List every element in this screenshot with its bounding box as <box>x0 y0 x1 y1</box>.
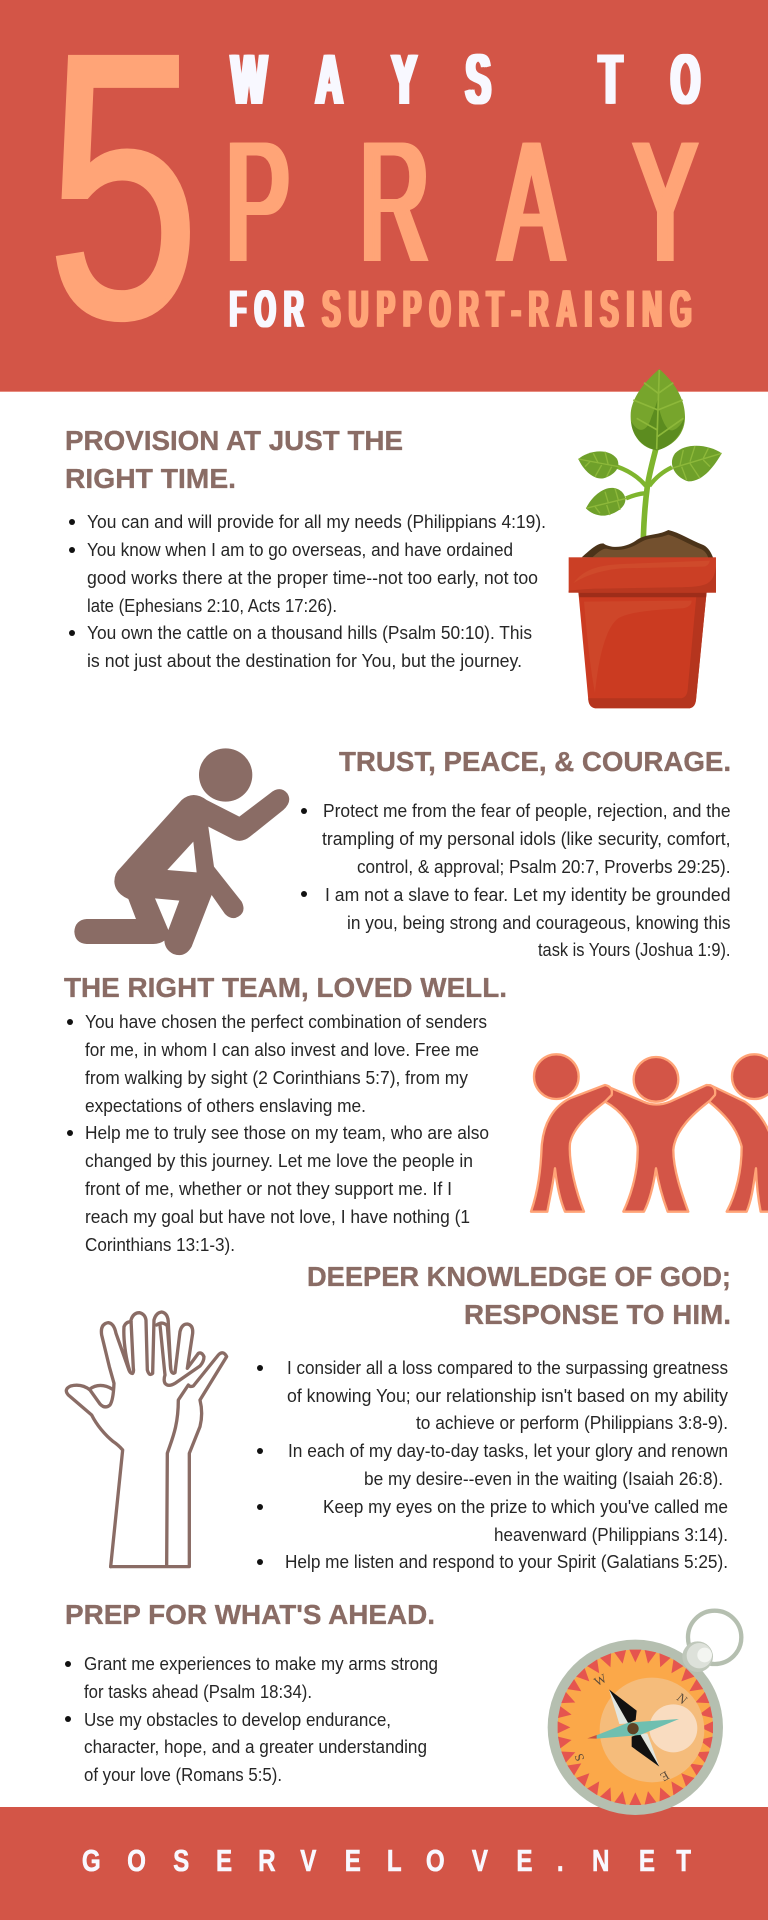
bullet list: prep: Grant me experiences to make my arms strong <box>84 1653 438 1674</box>
bullet list: provision: good works there at the proper time--not too early, not too <box>87 567 538 588</box>
heading: provision: RIGHT TIME. <box>65 463 236 494</box>
bullet list: right team: for me, in whom I can also invest and love. Free me <box>85 1039 479 1060</box>
bullet list: trust: I am not a slave to fear. Let my identity be grounded <box>325 884 730 905</box>
section: deeper knowledge <box>257 1261 731 1572</box>
bullet list: deeper knowledge <box>257 1357 729 1572</box>
bullet list: trust <box>301 800 730 960</box>
bullet list: prep: character, hope, and a greater understanding <box>84 1736 427 1757</box>
bullet list: deeper knowledge: In each of my day-to-day tasks, let your glory and renown <box>288 1440 728 1461</box>
bullet list: right team: Corinthians 13:1-3). <box>85 1234 235 1255</box>
heading: right team: THE RIGHT TEAM, LOVED WELL. <box>64 972 507 1003</box>
bullet list: prep: of your love (Romans 5:5). <box>84 1764 282 1785</box>
heading: deeper knowledge: RESPONSE TO HIM. <box>464 1299 731 1330</box>
section: right team <box>64 972 507 1255</box>
heading: prep: PREP FOR WHAT'S AHEAD. <box>65 1599 435 1630</box>
bullet list: prep: for tasks ahead (Psalm 18:34). <box>84 1681 312 1702</box>
icon: raised hands outline <box>66 1312 227 1567</box>
icon: compass: S <box>572 1752 587 1763</box>
bullet list: trust: control, & approval; Psalm 20:7, Proverbs 29:25). <box>357 856 730 877</box>
bullet list: right team: changed by this journey. Let me love the people in <box>85 1150 473 1171</box>
heading: deeper knowledge <box>307 1261 731 1330</box>
subtitle: for support-raising: FOR SUPPORT-RAISING <box>228 280 698 339</box>
icon: three people arm in arm <box>531 1054 768 1212</box>
bullet list: provision: is not just about the destination for You, but the journey. <box>87 650 522 671</box>
footer banner <box>0 1807 768 1920</box>
heading: provision: PROVISION AT JUST THE <box>65 425 403 456</box>
header banner <box>0 0 768 392</box>
bullet list: deeper knowledge: heavenward (Philippians 3:14). <box>494 1524 728 1545</box>
bullet list: right team: expectations of others enslaving me. <box>85 1095 366 1116</box>
icon: potted plant <box>569 369 722 708</box>
title: ways to: WAYS TO <box>229 41 747 120</box>
bullet list: right team: Help me to truly see those on my team, who are also <box>85 1122 489 1143</box>
section: trust, peace, courage <box>301 746 731 960</box>
bullet list: provision: You own the cattle on a thousand hills (Psalm 50:10). This <box>87 622 532 643</box>
bullet list: deeper knowledge: of knowing You; our relationship isn't based on my ability <box>287 1385 729 1406</box>
bullet list: deeper knowledge: I consider all a loss compared to the surpassing greatness <box>287 1357 728 1378</box>
bullet list: prep: Use my obstacles to develop endurance, <box>84 1709 391 1730</box>
icon: compass <box>548 1611 741 1815</box>
icon: compass: E <box>658 1768 672 1784</box>
section: prep <box>65 1599 438 1785</box>
bullet list: deeper knowledge: to achieve or perform (Philippians 3:8-9). <box>416 1412 728 1433</box>
title: pray: PRAY <box>222 106 764 298</box>
bullet list: right team: front of me, whether or not they support me. If I <box>85 1178 452 1199</box>
bullet list: trust: task is Yours (Joshua 1:9). <box>538 939 730 960</box>
bullet list: trust: Protect me from the fear of people, rejection, and the <box>323 800 730 821</box>
footer website text: GOSERVELOVE.NET <box>82 1843 691 1878</box>
icon: kneeling person <box>74 748 289 955</box>
bullet list: right team: reach my goal but have not love, I have nothing (1 <box>85 1206 470 1227</box>
bullet list: right team: You have chosen the perfect combination of senders <box>85 1011 487 1032</box>
bullet list: provision <box>69 511 546 671</box>
heading: trust: TRUST, PEACE, & COURAGE. <box>339 746 731 777</box>
bullet list: provision: You can and will provide for all my needs (Philippians 4:19). <box>87 511 546 532</box>
bullet list: prep <box>65 1653 438 1785</box>
icon: compass: W <box>592 1671 609 1689</box>
bullet list: provision: You know when I am to go overseas, and have ordained <box>87 539 513 560</box>
bullet list: trust: in you, being strong and courageous, knowing this <box>347 912 730 933</box>
heading: deeper knowledge: DEEPER KNOWLEDGE OF GOD; <box>307 1261 731 1292</box>
heading: provision <box>65 425 403 494</box>
bullet list: trust: trampling of my personal idols (like security, comfort, <box>322 828 730 849</box>
section: provision <box>65 425 546 671</box>
bullet list: deeper knowledge: Help me listen and respond to your Spirit (Galatians 5:25). <box>285 1551 728 1572</box>
bullet list: provision: late (Ephesians 2:10, Acts 17:26). <box>87 595 337 616</box>
bullet list: deeper knowledge: Keep my eyes on the prize to which you've called me <box>323 1496 728 1517</box>
bullet list: right team <box>67 1011 489 1255</box>
icon: compass: N <box>674 1691 690 1707</box>
bullet list: right team: from walking by sight (2 Corinthians 5:7), from my <box>85 1067 469 1088</box>
bullet list: deeper knowledge: be my desire--even in the waiting (Isaiah 26:8). <box>364 1468 723 1489</box>
